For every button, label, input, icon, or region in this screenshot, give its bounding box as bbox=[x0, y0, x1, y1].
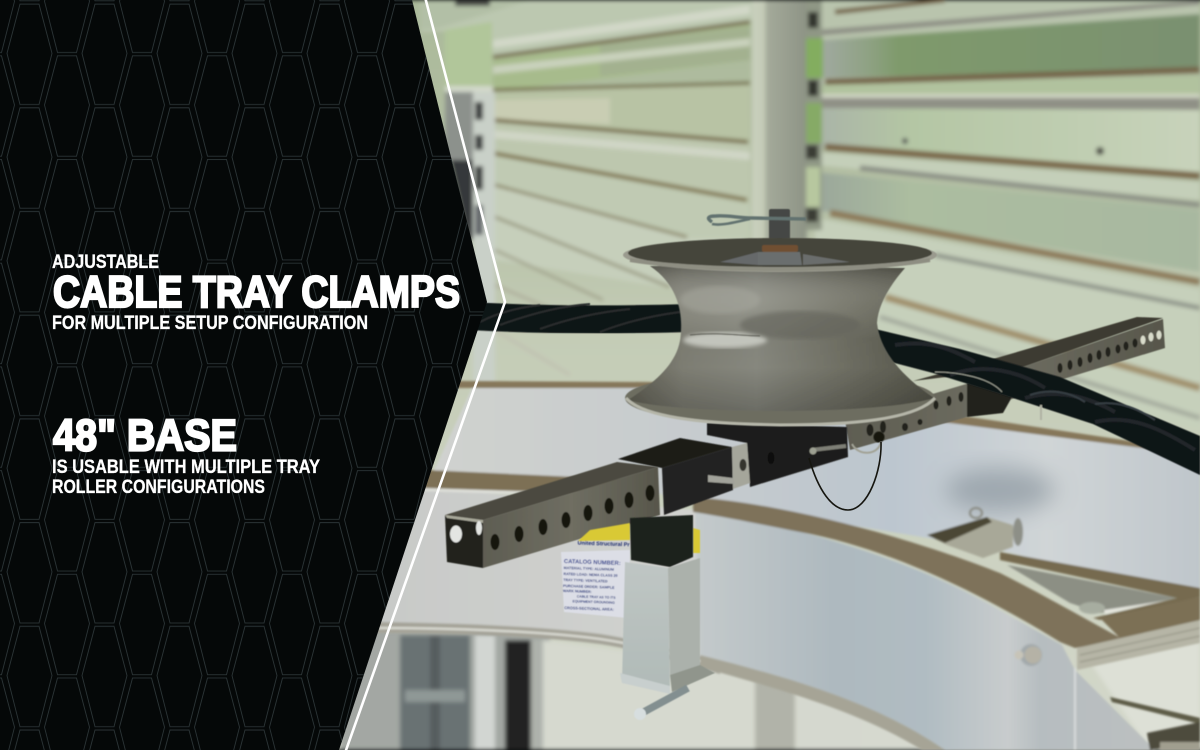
front tray panel left bbox=[378, 488, 720, 662]
background wall with slats bbox=[330, 0, 1200, 750]
clamp tube: front perforated section bbox=[445, 462, 660, 568]
lower flange bbox=[625, 371, 935, 425]
feature block: 48 inch base bbox=[52, 412, 320, 498]
feature description: ROLLER CONFIGURATIONS bbox=[52, 476, 265, 498]
galvanized gusset bbox=[1007, 565, 1177, 613]
front rail brown edge left bbox=[423, 470, 640, 495]
compliance label: RATED LOAD: NEMA CLASS 20 bbox=[563, 572, 618, 578]
far side of tray: silver rail bbox=[374, 381, 1200, 750]
title: CABLE TRAY CLAMPS bbox=[53, 268, 460, 317]
far rung brown bbox=[1000, 552, 1200, 620]
black clamp sleeve block bbox=[618, 423, 884, 515]
clamp tube: right perforated section bbox=[845, 317, 1165, 450]
eyebrow: ADJUSTABLE bbox=[52, 251, 159, 273]
lanyard pin bbox=[812, 446, 846, 450]
right black connector bbox=[967, 383, 1012, 417]
bottom rim bbox=[626, 398, 935, 425]
left edge frame bbox=[420, 0, 530, 392]
bolt bbox=[1014, 644, 1042, 666]
white chevron outline bbox=[345, 0, 505, 750]
clamp post and foot bbox=[620, 515, 715, 720]
compliance label: EQUIPMENT GROUNDING bbox=[572, 599, 615, 605]
pin and clip bbox=[709, 209, 806, 249]
left wall slats bbox=[420, 0, 760, 375]
foot plate bbox=[670, 665, 715, 692]
top rim bbox=[623, 238, 937, 272]
highlight bbox=[683, 332, 767, 348]
far rail top edge bbox=[458, 381, 1170, 449]
locking pin bolt bbox=[708, 475, 735, 484]
heading block bbox=[52, 251, 460, 334]
compliance label: PURCHASE ORDER: SAMPLE bbox=[563, 584, 615, 590]
body bbox=[628, 266, 934, 411]
lanyard wire bbox=[809, 442, 881, 510]
cable: right run bbox=[875, 329, 1200, 475]
feature description bbox=[52, 456, 320, 498]
compliance label: MATERIAL TYPE: ALUMINUM bbox=[564, 566, 614, 572]
feature description: IS USABLE WITH MULTIPLE TRAY bbox=[52, 456, 320, 478]
wall post bbox=[752, 0, 823, 300]
cable: left run bbox=[470, 304, 690, 332]
front tube holes bbox=[490, 485, 654, 550]
brown curved rail bbox=[693, 497, 1125, 648]
compliance label: TRAY TYPE: VENTILATED bbox=[563, 578, 608, 584]
galvanized insert bbox=[732, 443, 750, 489]
panel: black hexagon-pattern shape bbox=[0, 0, 487, 750]
feature heading: 48" BASE bbox=[53, 412, 237, 460]
hub bbox=[758, 252, 802, 265]
seam bbox=[1074, 668, 1076, 750]
right wall slats bbox=[815, 0, 1200, 430]
rod bbox=[640, 688, 688, 714]
lower right rung bbox=[1110, 697, 1200, 724]
compliance label: CROSS-SECTIONAL AREA: bbox=[564, 606, 614, 612]
rung side bbox=[1077, 620, 1200, 670]
compliance label: United Structural Pr bbox=[577, 540, 630, 548]
compliance label bbox=[561, 523, 700, 618]
compliance label: CATALOG NUMBER: bbox=[564, 559, 621, 567]
subtitle: FOR MULTIPLE SETUP CONFIGURATION bbox=[52, 312, 368, 334]
cross member bbox=[927, 517, 1013, 558]
compliance label: CABLE TRAY AS TO ITS bbox=[577, 594, 616, 600]
front tray panel right bbox=[695, 510, 1155, 750]
photo: cable tray roller on clamp bbox=[330, 0, 1200, 750]
lower background: window and wall bbox=[340, 620, 1200, 750]
tray shadow on far rail bbox=[945, 468, 1055, 512]
compliance label: WARK NUMBER: bbox=[563, 589, 592, 594]
spool roller bbox=[623, 209, 937, 425]
